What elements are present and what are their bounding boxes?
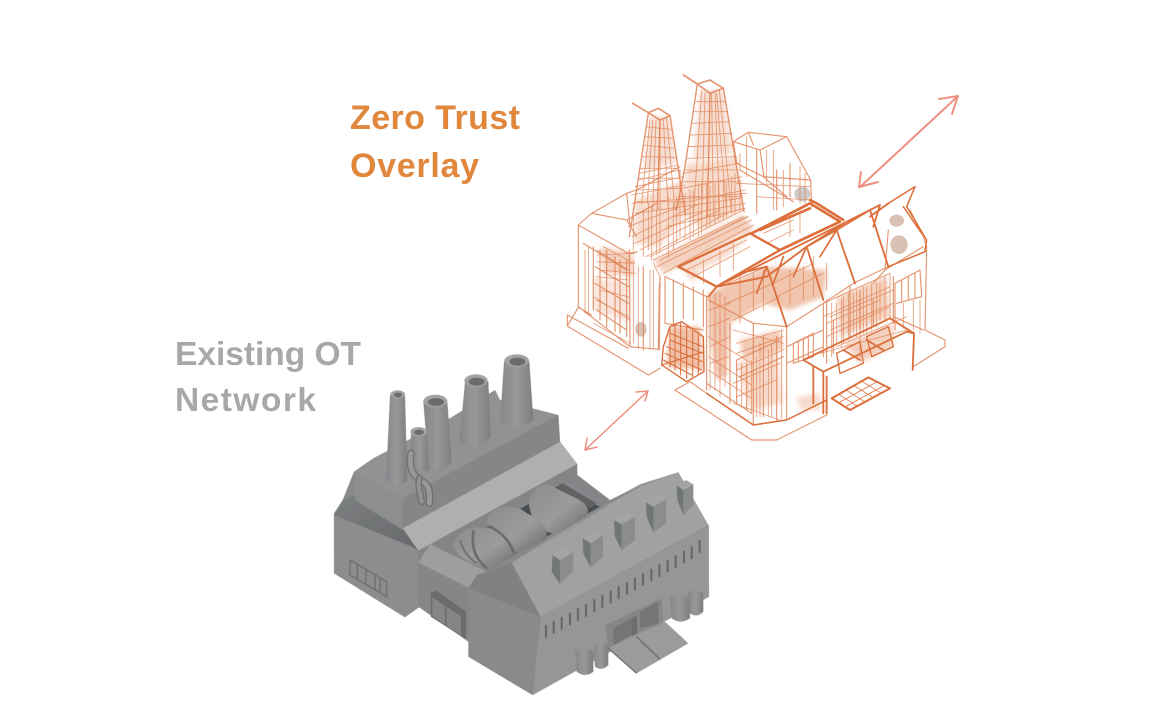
icon: machinery block — [662, 322, 704, 382]
courtyard — [418, 464, 610, 588]
title: Existing OT Network: Network — [175, 382, 316, 419]
arrow: overlay to outside — [859, 96, 958, 187]
chimneys — [386, 354, 533, 503]
upper block — [354, 390, 577, 551]
title: Zero Trust Overlay: Overlay — [350, 147, 479, 185]
thick structural lines — [678, 187, 927, 425]
icon: grate at the doorway — [832, 377, 890, 410]
dormers — [552, 480, 693, 584]
illustration: grey solid factory — [334, 354, 709, 695]
title: Zero Trust Overlay — [350, 99, 520, 185]
row of slit windows — [546, 540, 700, 638]
chimney lattice — [585, 90, 920, 420]
main hall — [468, 472, 709, 695]
arrow: network to overlay — [585, 391, 648, 450]
centre link block — [418, 544, 487, 642]
left wing — [334, 495, 420, 617]
window row — [350, 560, 387, 597]
tanks — [453, 485, 588, 571]
title: Existing OT Network: Existing OT — [175, 336, 362, 373]
entrance and ramp — [605, 598, 688, 673]
title: Zero Trust Overlay: Zero Trust — [350, 99, 520, 137]
side cylinders — [575, 590, 703, 675]
extra lattice density — [632, 163, 745, 255]
base silhouette — [334, 390, 709, 695]
illustration: orange wireframe factory — [567, 75, 945, 440]
soft tinted fill areas — [593, 90, 893, 410]
thin outline lines — [567, 75, 945, 440]
title: Existing OT Network — [175, 336, 362, 419]
